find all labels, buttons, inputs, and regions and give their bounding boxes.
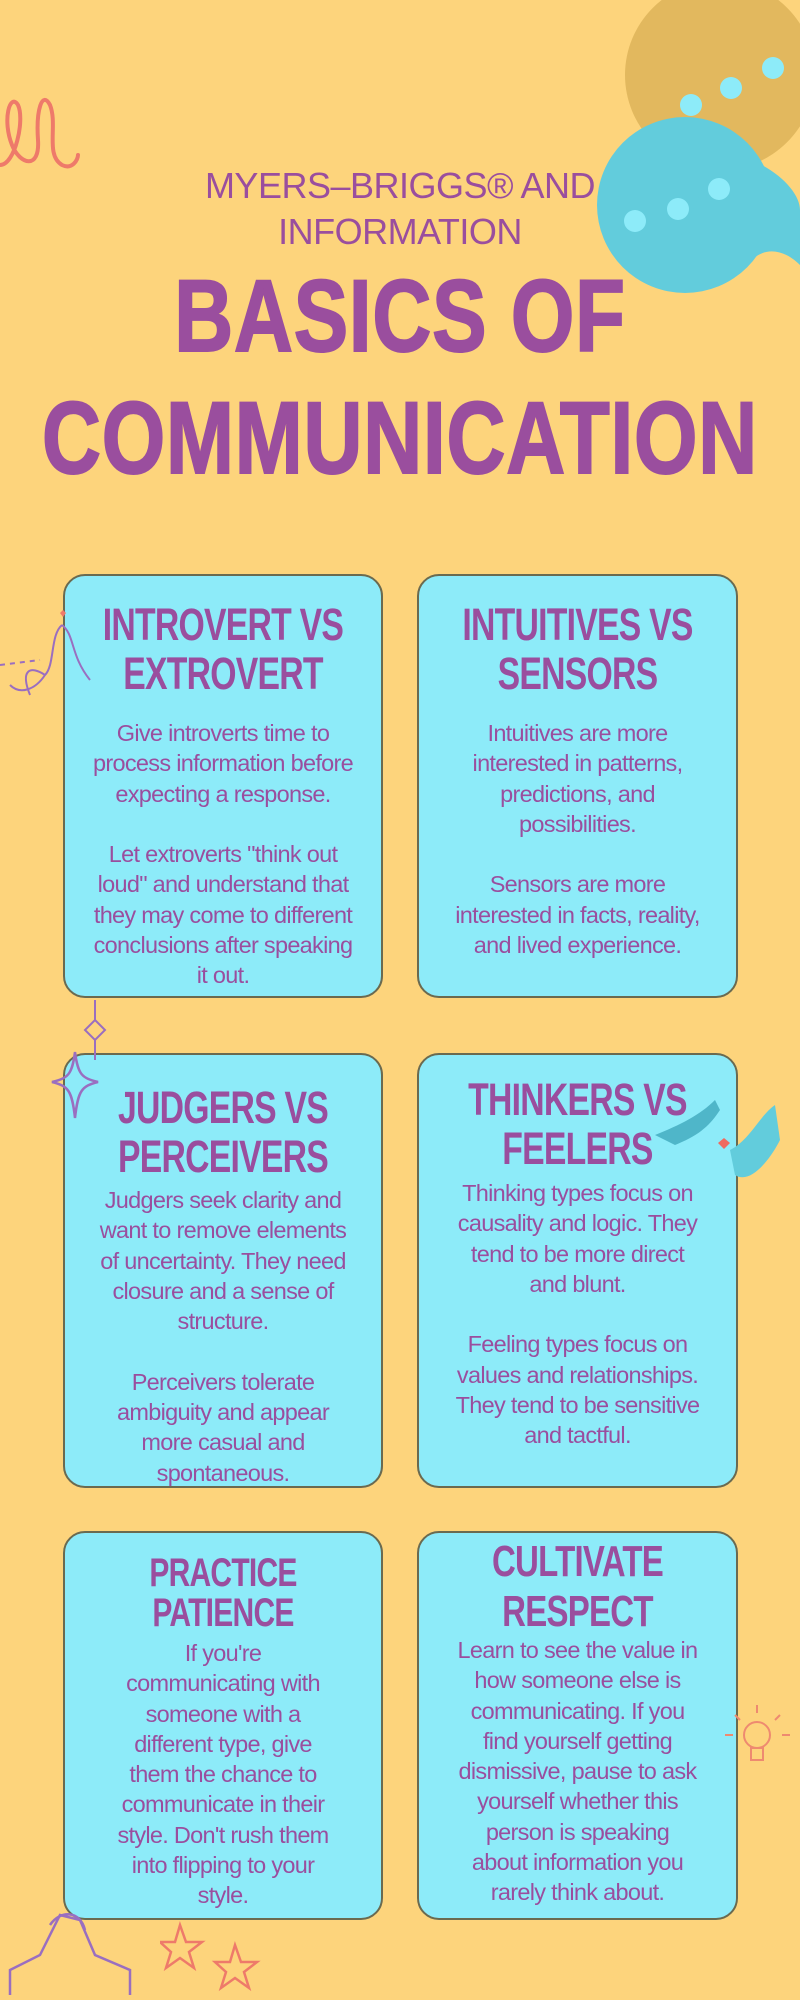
- body text: dismissive, pause to ask: [459, 1758, 696, 1784]
- body text: values and relationships.: [457, 1362, 698, 1388]
- body text: tend to be more direct: [471, 1241, 684, 1267]
- title: [42, 259, 758, 495]
- icon: clasped hands: [8, 1913, 132, 1995]
- body text: them the chance to: [129, 1761, 317, 1787]
- heading: PATIENCE: [152, 1591, 294, 1635]
- body text: find yourself getting: [483, 1728, 672, 1754]
- body text: [117, 1640, 329, 1908]
- heading: THINKERS VS: [468, 1074, 687, 1125]
- heading: CULTIVATE: [492, 1537, 663, 1586]
- title: COMMUNICATION: [42, 381, 758, 495]
- icon: lightbulb: [725, 1705, 790, 1761]
- heading: PRACTICE: [149, 1551, 297, 1595]
- body text: into flipping to your: [132, 1852, 314, 1878]
- icon: four-point star: [52, 1052, 98, 1118]
- body text: it out.: [197, 962, 249, 988]
- body text: They tend to be sensitive: [456, 1392, 699, 1418]
- body text: interested in facts, reality,: [455, 902, 700, 928]
- body text: yourself whether this: [477, 1788, 678, 1814]
- body text: process information before: [93, 750, 353, 776]
- body text: [93, 720, 353, 988]
- panel: judgers vs perceivers: [63, 1053, 383, 1488]
- icon: sparkle: [84, 1000, 106, 1060]
- body text: of uncertainty. They need: [100, 1248, 346, 1274]
- icon: hand with heart: [0, 610, 91, 696]
- heading: FEELERS: [502, 1123, 653, 1174]
- body text: communicating. If you: [471, 1698, 684, 1724]
- heading: [103, 599, 343, 699]
- body text: communicating with: [126, 1670, 320, 1696]
- body text: Let extroverts "think out: [109, 841, 337, 867]
- body text: person is speaking: [486, 1819, 669, 1845]
- body text: want to remove elements: [100, 1217, 346, 1243]
- heading: [468, 1074, 687, 1174]
- body text: style.: [198, 1882, 248, 1908]
- panel: practice patience: [63, 1531, 383, 1920]
- heading: [462, 599, 693, 699]
- body text: [455, 720, 700, 958]
- body text: communicate in their: [122, 1791, 324, 1817]
- heading: [118, 1082, 328, 1182]
- body text: they may come to different: [94, 902, 352, 928]
- body text: interested in patterns,: [473, 750, 682, 776]
- heading: INTROVERT VS: [103, 599, 343, 650]
- icon: hands with heart: [655, 1100, 780, 1178]
- body text: about information you: [472, 1849, 683, 1875]
- heading: [149, 1551, 297, 1635]
- heading: INTUITIVES VS: [462, 599, 693, 650]
- body text: Give introverts time to: [117, 720, 329, 746]
- body text: Feeling types focus on: [468, 1331, 687, 1357]
- heading: EXTROVERT: [123, 648, 323, 699]
- heading: JUDGERS VS: [118, 1082, 328, 1133]
- panel: introvert vs extrovert: [63, 574, 383, 998]
- body text: Sensors are more: [490, 871, 665, 897]
- body text: Learn to see the value in: [458, 1637, 697, 1663]
- body text: someone with a: [146, 1701, 300, 1727]
- body text: and tactful.: [524, 1422, 631, 1448]
- body text: loud" and understand that: [98, 871, 348, 897]
- body text: conclusions after speaking: [94, 932, 352, 958]
- heading: PERCEIVERS: [118, 1131, 328, 1182]
- body text: Perceivers tolerate: [132, 1369, 314, 1395]
- subtitle: [205, 165, 595, 252]
- body text: and lived experience.: [474, 932, 681, 958]
- subtitle: INFORMATION: [278, 211, 522, 252]
- body text: Thinking types focus on: [462, 1180, 693, 1206]
- heading: RESPECT: [502, 1587, 653, 1636]
- heading: [492, 1537, 663, 1636]
- subtitle: MYERS–BRIGGS® AND: [205, 165, 595, 206]
- body text: expecting a response.: [115, 781, 331, 807]
- body text: [100, 1187, 346, 1486]
- panel: thinkers vs feelers: [417, 1053, 738, 1488]
- icon: stars: [160, 1921, 260, 1991]
- body text: ambiguity and appear: [117, 1399, 329, 1425]
- body text: predictions, and: [500, 781, 655, 807]
- body text: how someone else is: [474, 1667, 681, 1693]
- body text: [458, 1637, 698, 1905]
- body text: spontaneous.: [157, 1460, 289, 1486]
- body text: structure.: [178, 1308, 268, 1334]
- body text: more casual and: [141, 1429, 305, 1455]
- body text: rarely think about.: [491, 1879, 664, 1905]
- title: BASICS OF: [174, 259, 626, 373]
- body text: [456, 1180, 699, 1448]
- body text: style. Don't rush them: [117, 1822, 329, 1848]
- body text: If you're: [185, 1640, 261, 1666]
- body text: Judgers seek clarity and: [105, 1187, 341, 1213]
- panel: intuitives vs sensors: [417, 574, 738, 998]
- body text: possibilities.: [519, 811, 636, 837]
- body text: and blunt.: [529, 1271, 626, 1297]
- icon: speech bubbles: [597, 0, 800, 293]
- body text: Intuitives are more: [487, 720, 668, 746]
- body text: causality and logic. They: [458, 1210, 697, 1236]
- decoration: coral squiggle: [0, 98, 80, 168]
- heading: SENSORS: [498, 648, 657, 699]
- body text: closure and a sense of: [112, 1278, 334, 1304]
- panel: cultivate respect: [417, 1531, 738, 1920]
- body text: different type, give: [134, 1731, 312, 1757]
